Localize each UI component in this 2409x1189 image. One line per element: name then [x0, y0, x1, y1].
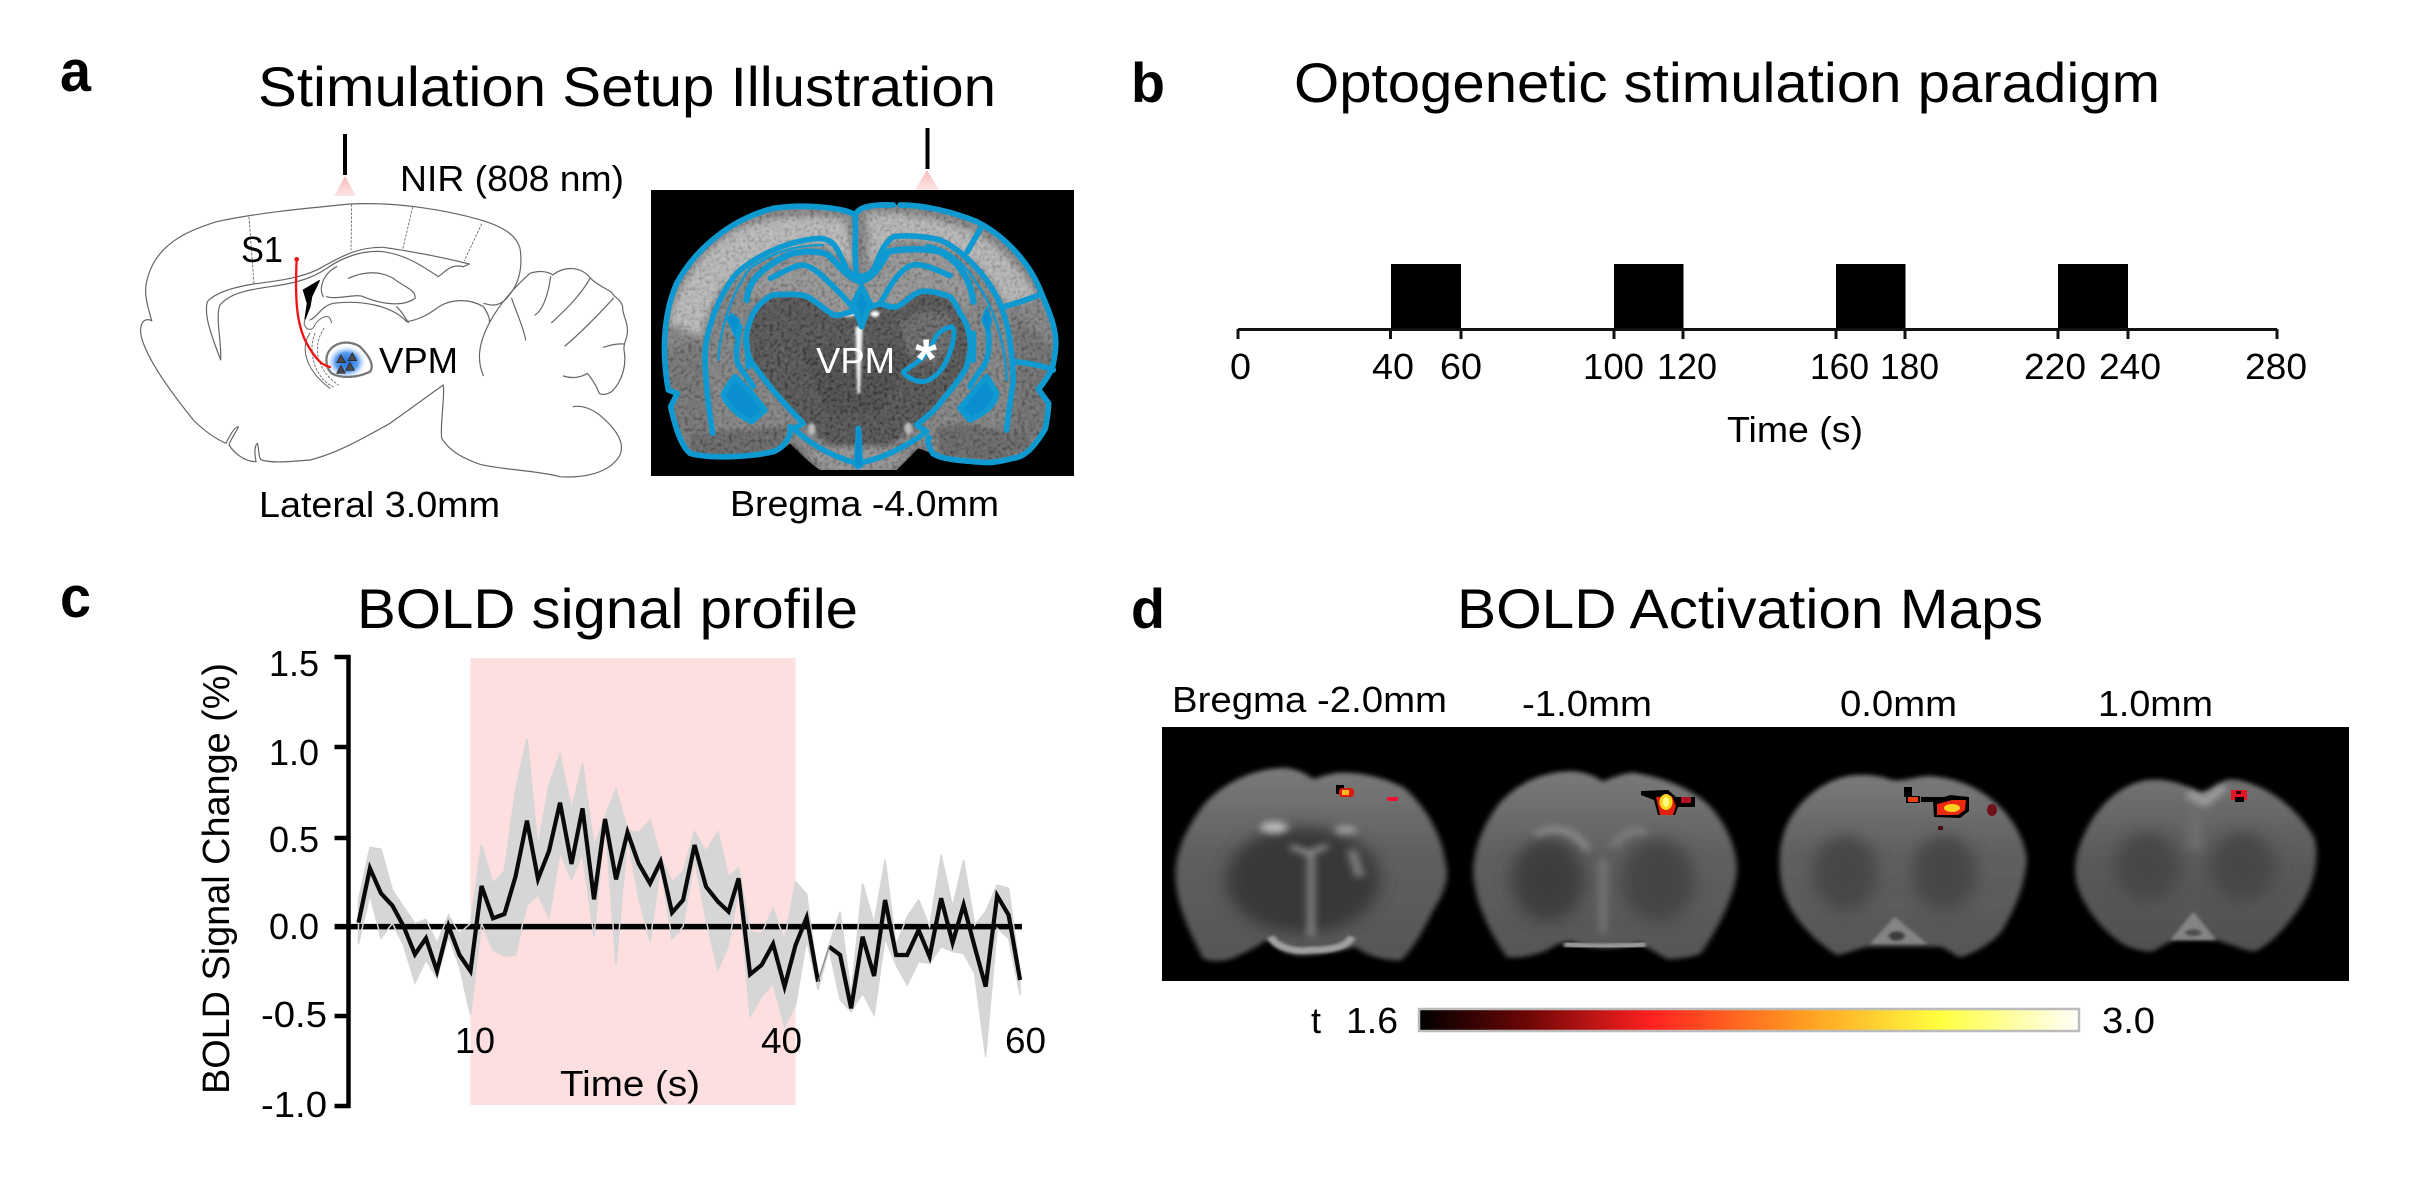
mean signal trace	[358, 803, 1020, 1008]
activation spots, slice 1	[1336, 785, 1398, 801]
zero baseline	[335, 924, 1022, 929]
panel: c, BOLD signal profile	[60, 565, 1046, 1125]
tick labels: 100	[1583, 346, 1644, 387]
stimulation blocks	[1391, 264, 2128, 330]
colour gradient bar	[1419, 1009, 2079, 1031]
x tick labels: 40	[761, 1020, 802, 1061]
panel letter b: b	[1131, 51, 1165, 114]
chart: BOLD signal line chart	[196, 643, 1046, 1125]
tick labels: 60	[1440, 346, 1482, 387]
y axis title: BOLD Signal Change (%)	[196, 663, 238, 1094]
tick labels: 120	[1657, 346, 1717, 387]
tick labels: 160	[1810, 346, 1869, 387]
y tick labels: 0.5	[269, 819, 319, 860]
title: Optogenetic stimulation paradigm: Optogenetic stimulation paradigm	[1294, 51, 2160, 114]
slice label: 0.0mm: 0.0mm	[1840, 683, 1957, 724]
tick labels: 180	[1880, 346, 1939, 387]
icon: right optical fiber with light cone	[915, 128, 939, 190]
label: VPM on MRI: VPM	[816, 340, 895, 381]
tick labels	[1230, 346, 2307, 387]
x axis title: Time (s): Time (s)	[560, 1063, 700, 1104]
illustration: sagittal brain section	[141, 204, 627, 477]
panel: d, BOLD activation maps	[1131, 577, 2349, 1041]
tick labels: 280	[2245, 346, 2307, 387]
label: VPM on sagittal section: VPM	[379, 340, 458, 381]
tick labels: 220	[2024, 346, 2086, 387]
legend max value: 3.0	[2102, 1000, 2155, 1041]
image strip: activation map slices	[1162, 727, 2349, 981]
legend min value: 1.6	[1346, 1000, 1398, 1041]
tick labels: 40	[1372, 346, 1414, 387]
x tick labels: 10	[455, 1020, 495, 1061]
activation cluster, slice 2	[1641, 790, 1695, 815]
panel letter c: c	[60, 565, 91, 630]
stimulation window shading	[470, 658, 796, 1105]
title: BOLD signal profile: BOLD signal profile	[357, 577, 858, 640]
panel: b, optogenetic stimulation paradigm	[1131, 51, 2307, 450]
y tick labels: -0.5	[261, 994, 327, 1035]
legend: t-value colour bar	[1311, 1000, 2155, 1041]
panel letter d: d	[1131, 577, 1165, 640]
y tick labels: 0.0	[269, 906, 319, 947]
brain slice 3	[1780, 775, 2027, 957]
brain slice 2	[1473, 771, 1737, 959]
brain slice 1	[1175, 768, 1447, 961]
caption: Bregma -4.0mm: Bregma -4.0mm	[730, 483, 999, 524]
chart: stimulation timeline	[1230, 264, 2307, 450]
marker: white asterisk: *	[915, 327, 937, 390]
activation cluster, slice 3	[1904, 787, 1997, 830]
tick labels: 240	[2099, 346, 2161, 387]
tick labels: 0	[1230, 346, 1251, 387]
activation spot, slice 4	[2231, 790, 2247, 802]
panel letter a: a	[60, 39, 92, 104]
x tick labels	[455, 1020, 1046, 1061]
slice label: Bregma -2.0mm: Bregma -2.0mm	[1172, 679, 1447, 720]
error band	[358, 738, 1020, 1057]
x tick labels: 60	[1005, 1020, 1046, 1061]
caption: Lateral 3.0mm: Lateral 3.0mm	[259, 484, 500, 525]
title: Stimulation Setup Illustration: Stimulation Setup Illustration	[258, 55, 996, 118]
band edges over baseline	[358, 738, 1020, 1057]
y tick labels: 1.5	[269, 643, 319, 684]
axis title: Time (s): Time (s)	[1727, 409, 1863, 450]
brain slice 4	[2075, 779, 2316, 952]
label: NIR wavelength: NIR (808 nm)	[400, 158, 624, 199]
y tick labels: 1.0	[269, 732, 319, 773]
y tick labels	[261, 643, 327, 1125]
label: S1: S1	[241, 229, 283, 270]
icon: left optical fiber with light cone	[334, 134, 356, 196]
time axis	[1238, 329, 2277, 339]
y tick labels: -1.0	[261, 1084, 327, 1125]
legend label t: t	[1311, 1000, 1321, 1041]
illustration: coronal MRI with atlas overlay	[651, 190, 1074, 477]
panel: a, stimulation setup	[60, 39, 1074, 525]
slice label: -1.0mm: -1.0mm	[1522, 683, 1652, 724]
title: BOLD Activation Maps: BOLD Activation Maps	[1457, 577, 2043, 640]
slice label: 1.0mm: 1.0mm	[2098, 683, 2213, 724]
y axis	[334, 655, 350, 1108]
